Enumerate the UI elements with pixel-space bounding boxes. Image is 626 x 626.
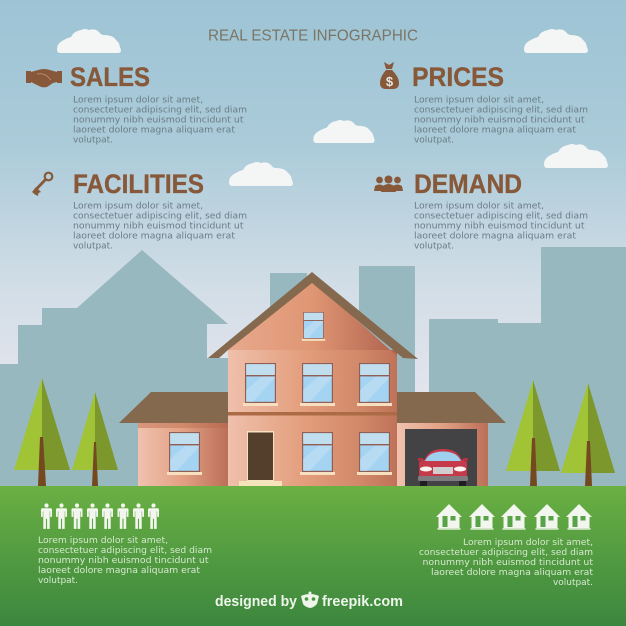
text block: facilities: nonummy nibh euismod tincidunt ut: [73, 220, 244, 232]
garage with car: [405, 429, 477, 486]
left wing roof: [119, 392, 228, 423]
attic window: [302, 312, 325, 341]
gable: [228, 280, 397, 356]
text block: prices: volutpat.: [414, 134, 454, 146]
icon: money bag: [380, 62, 399, 89]
heading: sales: SALES: [70, 62, 150, 92]
text block: facilities: [73, 200, 247, 252]
right wing roof: [397, 392, 506, 423]
text block: sales: consectetuer adipiscing elit, sed diam: [73, 104, 247, 116]
text block: facilities: laoreet dolore magna aliquam erat: [73, 230, 235, 242]
heading: prices: PRICES: [412, 62, 504, 92]
tree 2: [72, 392, 118, 486]
tree 3: [506, 380, 560, 486]
text block: people: volutpat.: [38, 575, 78, 586]
cloud top left: [57, 29, 121, 53]
sky background: [0, 0, 626, 486]
text block: houses: [419, 537, 593, 588]
text block: demand: laoreet dolore magna aliquam erat: [414, 230, 576, 242]
icon row: houses: [436, 504, 592, 530]
footer credit: [215, 592, 403, 610]
lower windows: [167, 432, 392, 475]
text block: houses: Lorem ipsum dolor sit amet,: [463, 537, 593, 548]
left wing: [138, 423, 228, 486]
icon: key: [32, 173, 52, 196]
icon: money bag: $: [386, 74, 394, 89]
text block: houses: volutpat.: [553, 577, 593, 588]
text block: houses: laoreet dolore magna aliquam erat: [431, 567, 593, 578]
text block: demand: consectetuer adipiscing elit, sed diam: [414, 210, 588, 222]
text block: prices: laoreet dolore magna aliquam erat: [414, 124, 576, 136]
panel: prices: [380, 62, 588, 146]
text block: demand: Lorem ipsum dolor sit amet,: [414, 200, 544, 212]
text block: people: consectetuer adipiscing elit, sed diam: [38, 545, 212, 556]
text block: sales: volutpat.: [73, 134, 113, 146]
tree 1: [14, 378, 70, 486]
text block: people: laoreet dolore magna aliquam erat: [38, 565, 200, 576]
text block: prices: nonummy nibh euismod tincidunt ut: [414, 114, 585, 126]
cloud centre: [313, 120, 375, 143]
tree 4: [561, 383, 615, 486]
text block: prices: [414, 94, 588, 146]
text block: demand: volutpat.: [414, 240, 454, 252]
text block: sales: Lorem ipsum dolor sit amet,: [73, 94, 203, 106]
heading: facilities: FACILITIES: [73, 169, 204, 199]
panel: sales: [26, 62, 247, 146]
text block: people: [38, 535, 212, 586]
grass: [0, 486, 626, 626]
text block: demand: nonummy nibh euismod tincidunt ut: [414, 220, 585, 232]
floor band: [228, 412, 397, 416]
text block: prices: Lorem ipsum dolor sit amet,: [414, 94, 544, 106]
text block: people: nonummy nibh euismod tincidunt ut: [38, 555, 209, 566]
door: [239, 431, 282, 486]
house: [119, 272, 506, 486]
main roof: [208, 272, 418, 359]
text block: people: Lorem ipsum dolor sit amet,: [38, 535, 168, 546]
main wall: [228, 350, 397, 486]
text block: sales: [73, 94, 247, 146]
icon row: people: [41, 503, 159, 529]
text block: sales: nonummy nibh euismod tincidunt ut: [73, 114, 244, 126]
text block: facilities: consectetuer adipiscing elit, sed diam: [73, 210, 247, 222]
cloud top right: [524, 29, 588, 53]
left wing eave shadow: [138, 423, 228, 428]
text block: prices: consectetuer adipiscing elit, sed diam: [414, 104, 588, 116]
car: [418, 449, 468, 486]
cloud right: [544, 144, 608, 168]
text block: houses: nonummy nibh euismod tincidunt ut: [422, 557, 593, 568]
panel: demand: [374, 169, 588, 252]
text block: sales: laoreet dolore magna aliquam erat: [73, 124, 235, 136]
text block: houses: consectetuer adipiscing elit, sed diam: [419, 547, 593, 558]
footer credit: freepik.com: [322, 594, 403, 610]
icon: freepik logo: [301, 592, 319, 608]
footer credit: designed by: [215, 594, 297, 610]
cloud middle left: [229, 162, 293, 186]
icon: handshake: [26, 69, 62, 87]
skyline silhouette: [0, 247, 626, 486]
icon: people group: [374, 176, 403, 192]
text block: demand: [414, 200, 588, 252]
panel: facilities: [32, 169, 247, 252]
text block: facilities: volutpat.: [73, 240, 113, 252]
right wing: [397, 423, 488, 486]
upper windows: [243, 363, 392, 406]
heading: demand: DEMAND: [414, 169, 522, 199]
title: REAL ESTATE INFOGRAPHIC: [208, 28, 418, 44]
text block: facilities: Lorem ipsum dolor sit amet,: [73, 200, 203, 212]
